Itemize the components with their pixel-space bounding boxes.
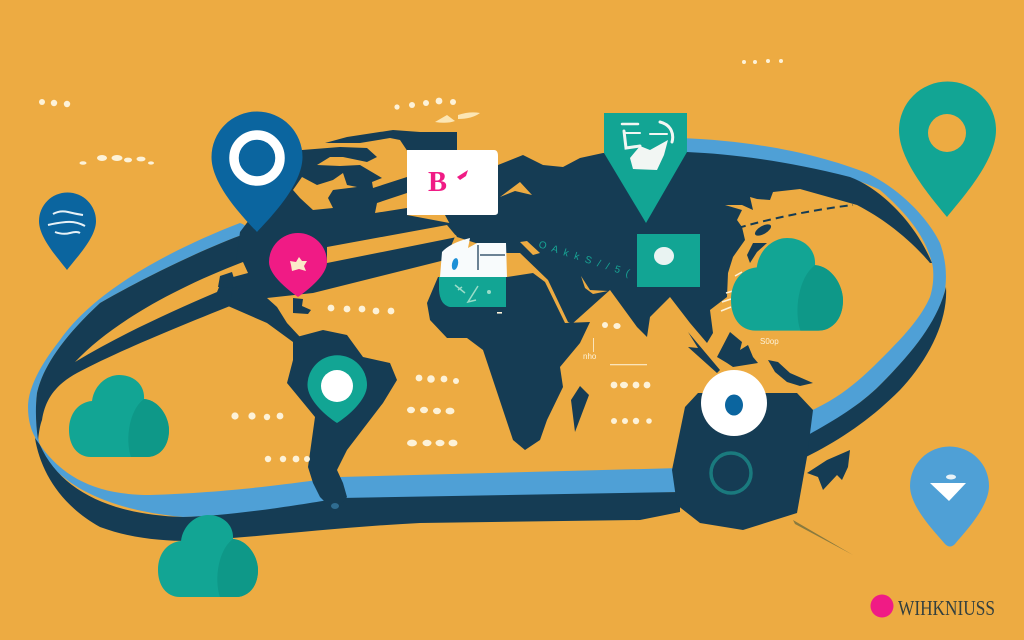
teal ring bbox=[711, 453, 751, 493]
tick bbox=[592, 338, 595, 352]
emblem bbox=[622, 122, 673, 170]
coastal fragment bbox=[747, 243, 767, 263]
teal square with white blob bbox=[637, 234, 700, 287]
Caribbean island bbox=[218, 272, 237, 288]
flower bbox=[290, 257, 307, 271]
white card with pink letter bbox=[407, 150, 498, 215]
pale coast marks bbox=[721, 272, 742, 311]
Atlantic strip bbox=[327, 225, 457, 263]
logo dot bbox=[870, 594, 894, 618]
cloud: left bbox=[69, 375, 169, 457]
cloud: right bbox=[731, 238, 843, 331]
camera block bbox=[672, 370, 813, 530]
Persian Gulf bbox=[581, 276, 608, 294]
pin hole bbox=[928, 114, 966, 152]
eye shaped island bbox=[753, 222, 773, 238]
cloud: bottom bbox=[158, 515, 258, 597]
eye pupil bbox=[725, 394, 743, 416]
ring bbox=[234, 135, 280, 181]
cloud shade bbox=[217, 539, 258, 597]
map: North America bbox=[75, 130, 460, 362]
island dot bbox=[331, 503, 339, 509]
map pin: small blue left bbox=[39, 192, 96, 270]
main landmass bbox=[230, 147, 460, 306]
Black Sea bbox=[520, 241, 540, 255]
navy ring band: upper left arm bbox=[36, 225, 262, 440]
map pin: pink bbox=[269, 233, 327, 297]
wave lines bbox=[48, 211, 85, 234]
small eye bbox=[946, 474, 956, 480]
Australia fragment bbox=[768, 360, 813, 386]
blob bbox=[654, 247, 674, 265]
Baltic mark bbox=[500, 182, 532, 197]
navy ring band: bottom bbox=[35, 438, 680, 541]
card white top bbox=[440, 238, 507, 277]
small label: Indian Ocean bbox=[583, 338, 647, 365]
bird silhouette bbox=[807, 450, 850, 490]
map pin: South America teal bbox=[308, 355, 367, 423]
map pin: large blue bbox=[212, 112, 302, 232]
dash bbox=[610, 364, 647, 365]
card divider bbox=[478, 245, 505, 270]
dotted labels bbox=[39, 59, 783, 462]
arctic piece bbox=[325, 130, 457, 152]
small label: Indian Ocean: nho bbox=[583, 352, 597, 361]
leaf marks bbox=[455, 285, 478, 302]
down triangle bbox=[930, 483, 966, 501]
cloud shade bbox=[128, 399, 169, 457]
white and teal card bbox=[439, 238, 507, 307]
squiggle marks top bbox=[435, 112, 480, 123]
map pin: top right teal bbox=[899, 82, 996, 217]
teal shield pin bbox=[604, 113, 687, 223]
dot bbox=[487, 290, 491, 294]
map: Africa bbox=[427, 273, 590, 450]
card accent bbox=[457, 170, 468, 180]
central hole bbox=[293, 173, 357, 210]
central America bbox=[228, 298, 300, 342]
map: South America bbox=[287, 330, 397, 512]
teal annotation text: O A k k S / / 5 ( bbox=[537, 239, 631, 279]
white eye bbox=[701, 370, 767, 436]
Indonesia bbox=[717, 332, 758, 367]
navy ring band: lower right bbox=[806, 287, 946, 457]
small label: Pacific: S0op bbox=[760, 337, 779, 346]
map: Madagascar bbox=[571, 386, 589, 432]
logo text: WIHKNIUSS bbox=[898, 596, 995, 620]
small island bbox=[293, 298, 311, 314]
blue ring band: top and right bbox=[680, 138, 946, 437]
map pin: bottom right blue bbox=[910, 446, 989, 546]
card text: B bbox=[428, 167, 447, 198]
spike bbox=[793, 520, 853, 555]
blue drop bbox=[451, 258, 459, 270]
Sumatra bbox=[688, 332, 720, 373]
cloud shade bbox=[797, 265, 843, 331]
white center bbox=[321, 370, 353, 402]
blue ring band: left and bottom bbox=[28, 223, 680, 517]
dashed coastal line bbox=[738, 205, 853, 228]
left wedge bbox=[75, 262, 248, 362]
map: Eurasia bbox=[445, 150, 932, 386]
